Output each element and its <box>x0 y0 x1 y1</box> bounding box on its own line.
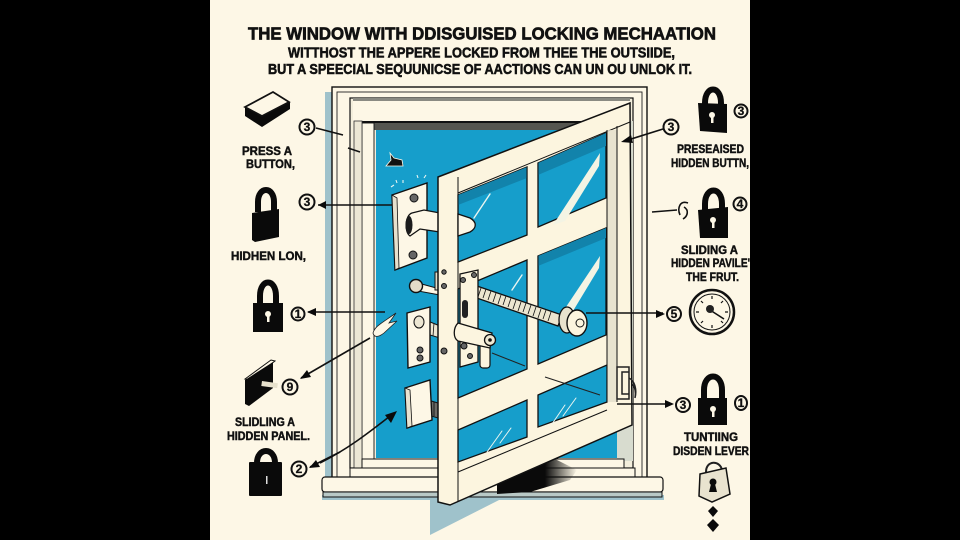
right column callouts <box>586 90 750 532</box>
callout number 3 with arrow: 3 <box>304 120 311 134</box>
hardware: sash plate and cylinder lever <box>441 270 496 368</box>
icon: sliding panel <box>245 360 278 406</box>
label: press a button: PRESS A <box>242 146 292 158</box>
title block <box>248 24 716 78</box>
label: tunting disden lever: DISDEN LEVER <box>673 446 750 458</box>
callout number 9 with arrow <box>282 338 370 394</box>
number 4 <box>734 197 746 211</box>
pane shade <box>458 133 606 266</box>
icon: sketched padlock tag <box>699 463 730 502</box>
glass reflections <box>553 153 600 316</box>
cast shadow <box>322 92 664 535</box>
callout number 2 with arrows: 2 <box>296 462 303 476</box>
label: preseaised hidden button: PRESEAISED <box>677 144 744 156</box>
label: sliding a hidden pavile the frut: THE FRUT. <box>686 272 739 284</box>
callout number 2 with arrows <box>292 411 397 476</box>
label: tunting disden lever: TUNTIING <box>684 432 738 444</box>
callout number 3 with arrow to lever: 3 <box>680 398 687 412</box>
icon: padlock square <box>249 451 282 496</box>
icon: padlock final <box>698 376 727 425</box>
callout number 3 with pointer to frame: 3 <box>668 120 675 134</box>
icon: padlock with keyhole <box>253 282 283 332</box>
number 1 <box>735 396 747 410</box>
icon: padlock large <box>698 190 728 238</box>
window frame <box>332 87 647 482</box>
label: sliding a hidden panel: HIDDEN PANEL. <box>227 431 310 443</box>
callout number 3 with arrow to lever <box>617 398 690 412</box>
hardware: upper handle plate <box>392 183 440 270</box>
callout number 9 with arrow: 9 <box>287 380 294 394</box>
callout number 1 with arrow: 1 <box>295 307 302 321</box>
hardware: lower sliding plate <box>405 380 438 428</box>
icon: diamonds <box>707 506 719 532</box>
callout number 1 with arrow <box>292 307 385 321</box>
hardware: threaded bolt and knob <box>468 284 587 336</box>
left column callouts <box>227 92 397 496</box>
hidden lever catch <box>617 367 636 399</box>
handle tip over pane <box>458 214 475 236</box>
number 3 <box>734 104 748 118</box>
callout number 5 with arrow <box>586 307 681 321</box>
label: sliding a hidden panel <box>227 417 310 443</box>
callout number 3 with arrow to plate: 3 <box>304 195 311 209</box>
icon: padlock with keyhole <box>698 90 727 133</box>
sash bead and muntin lines <box>458 122 630 502</box>
callout number 3 with arrow <box>300 120 360 152</box>
label: sliding a hidden panel: SLIDLING A <box>235 417 295 429</box>
thin diagonal pointer on sash <box>492 353 600 395</box>
callout number 3 with pointer to frame <box>621 120 678 143</box>
icon: button block <box>245 92 290 127</box>
label: press a button <box>242 146 295 171</box>
hook pointer <box>652 202 688 219</box>
icon: padlock tall <box>252 190 279 242</box>
title block: BUT A SPEECIAL SEQUUNICSE OF AACTIONS CAN UN OU UNLOK IT. <box>268 62 692 78</box>
label: press a button: BUTTON, <box>246 159 295 171</box>
icon: clock <box>690 290 734 334</box>
callout number 3 with arrow to plate <box>300 194 392 210</box>
label: preseaised hidden button <box>671 144 749 170</box>
hand pointer <box>373 313 397 336</box>
label: sliding a hidden pavile the frut <box>671 245 750 284</box>
spark marks near plate <box>391 175 426 187</box>
title block: THE WINDOW WITH DDISGUISED LOCKING MECHAATION <box>248 24 716 44</box>
window illustration <box>322 87 664 535</box>
label: sliding a hidden pavile the frut: HIDDEN PAVILE' <box>671 258 750 270</box>
number 1: 1 <box>738 396 745 410</box>
window sill <box>322 458 663 497</box>
number 4: 4 <box>737 197 744 211</box>
blue glass <box>376 130 617 458</box>
title block: WITTHOST THE APPERE LOCKED FROM THEE THE OUTSIIDE, <box>288 46 675 62</box>
small black arrow mark on glass <box>386 153 403 166</box>
hardware: left bolt and plate <box>407 272 441 368</box>
label: hidden lon: HIDHEN LON, <box>231 251 306 263</box>
cream paper panel <box>210 0 750 540</box>
callout number 5 with arrow: 5 <box>671 307 678 321</box>
sash panes <box>458 133 607 462</box>
opened casement sash <box>438 103 632 505</box>
label: preseaised hidden button: HIDDEN BUTTN, <box>671 158 749 170</box>
label: tunting disden lever <box>673 432 750 458</box>
label: sliding a hidden pavile the frut: SLIDING A <box>681 245 738 257</box>
number 3: 3 <box>738 104 745 118</box>
